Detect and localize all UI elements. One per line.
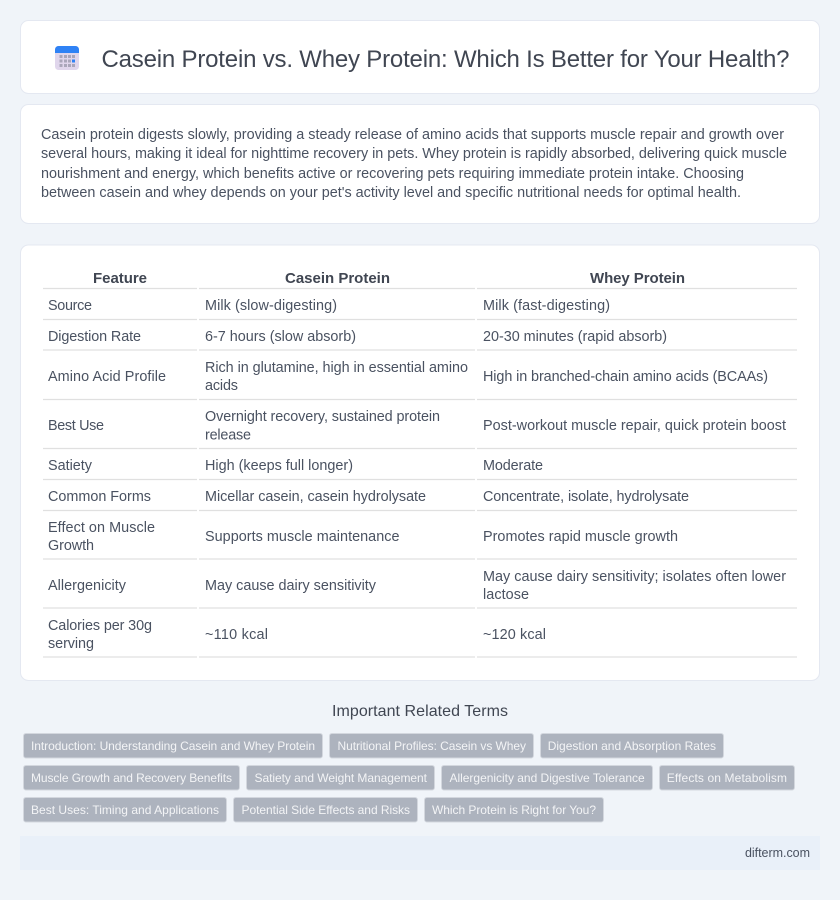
row: amino acid profile [48,360,768,394]
row: common forms [48,489,689,505]
row: calories: ~110 kcal [205,627,268,643]
row: effect on muscle growth: Promotes rapid muscle growth [483,529,678,545]
related terms tags: Potential Side Effects and Risks [242,803,410,817]
row: calories: ~120 kcal [483,627,546,643]
icon: calendar [55,46,79,70]
row: satiety: High (keeps full longer) [205,458,353,474]
table header row: Casein Protein [285,270,390,287]
row: effect on muscle growth: Effect on Muscle [48,520,155,536]
intro paragraph [41,127,787,201]
header panel [20,20,820,94]
row: amino acid profile: Amino Acid Profile [48,369,166,385]
intro paragraph: between casein and whey depends on your pet's activity level and specific nutritional needs for optimal health. [41,185,741,201]
related terms tags: Satiety and Weight Management [254,771,428,785]
row: source: Source [48,298,92,314]
row: allergenicity: May cause dairy sensitivity; isolates often lower [483,569,786,585]
row: amino acid profile: High in branched-chain amino acids (BCAAs) [483,369,768,385]
row: best use: Overnight recovery, sustained protein [205,409,440,425]
row: amino acid profile: Rich in glutamine, high in essential amino [205,360,468,376]
row: best use: Best Use [48,418,104,434]
table header row: Whey Protein [590,270,685,287]
related terms tags: Introduction: Understanding Casein and Whey Protein [31,739,315,753]
footer site name: difterm.com [745,846,810,860]
row: best use: release [205,428,251,444]
panel: comparison table [20,245,820,680]
heading: important related terms: Important Related Terms [332,703,508,720]
row: effect on muscle growth [48,520,678,554]
row: allergenicity: Allergenicity [48,578,127,594]
row: source: Milk (fast-digesting) [483,298,610,314]
related terms tags: Which Protein is Right for You? [432,803,596,817]
row: digestion rate: 6-7 hours (slow absorb) [205,329,356,345]
panel: introduction [20,104,820,224]
table header row [93,270,685,287]
related terms tags: Allergenicity and Digestive Tolerance [450,771,645,785]
related terms tags: Nutritional Profiles: Casein vs Whey [338,739,526,753]
row: digestion rate [48,329,667,345]
row: satiety: Moderate [483,458,543,474]
row: effect on muscle growth: Supports muscle maintenance [205,529,400,545]
row: effect on muscle growth: Growth [48,538,94,554]
row: satiety [48,458,543,474]
related terms tags: Muscle Growth and Recovery Benefits [31,771,232,785]
row: calories [48,618,546,652]
row: allergenicity: lactose [483,587,529,603]
intro paragraph: Casein protein digests slowly, providing a steady release of amino acids that supports muscle repair and growth over [41,127,784,143]
row: amino acid profile: acids [205,378,238,394]
row: source [48,298,610,314]
row: best use: Post-workout muscle repair, quick protein boost [483,418,786,434]
related terms tags: Best Uses: Timing and Applications [31,803,219,817]
row: common forms: Common Forms [48,489,151,505]
row: digestion rate: Digestion Rate [48,329,141,345]
row: allergenicity: May cause dairy sensitivity [205,578,377,594]
intro paragraph: nourishment and energy, which benefits active or recovering pets requiring immediate protein intake. Choosing [41,166,744,182]
row: digestion rate: 20-30 minutes (rapid absorb) [483,329,667,345]
related terms tags: Effects on Metabolism [667,771,787,785]
row: source: Milk (slow-digesting) [205,298,337,314]
row: calories: Calories per 30g [48,618,152,634]
row: allergenicity [48,569,786,603]
row: best use [48,409,786,444]
related terms tags: Digestion and Absorption Rates [548,739,716,753]
related terms tags [24,734,794,822]
row: common forms: Micellar casein, casein hydrolysate [205,489,426,505]
intro paragraph: several hours, making it ideal for nighttime recovery in pets. Whey protein is rapidly absorbed, delivering quick muscle [41,146,787,162]
row: satiety: Satiety [48,458,93,474]
table header row: Feature [93,270,147,287]
title: Casein Protein vs. Whey Protein: Which Is Better for Your Health? [102,46,790,73]
footer bar [20,836,820,870]
row: common forms: Concentrate, isolate, hydrolysate [483,489,689,505]
row: calories: serving [48,636,94,652]
